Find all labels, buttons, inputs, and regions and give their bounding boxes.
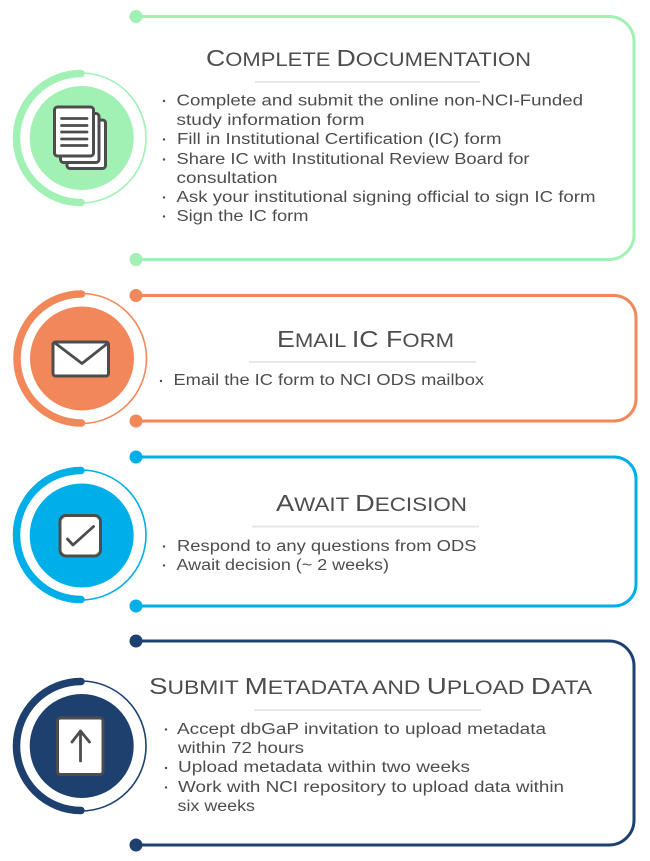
bullet list: Complete and submit the online non-NCI-Funded bbox=[176, 93, 583, 110]
connector dots bbox=[130, 289, 142, 428]
panel outline bbox=[136, 296, 636, 421]
bullet list: Sign the IC form bbox=[176, 208, 308, 225]
icon: upload bbox=[58, 718, 103, 774]
bullet list: consultation bbox=[176, 170, 278, 187]
panel outline bbox=[136, 641, 634, 845]
bullet list: six weeks bbox=[178, 798, 255, 815]
bullet list bbox=[163, 93, 596, 225]
heading: SUBMIT METADATA AND UPLOAD DATA bbox=[149, 673, 592, 699]
connector dots bbox=[130, 10, 142, 266]
panel outline bbox=[136, 457, 636, 606]
connector dots bbox=[130, 634, 142, 852]
bullet list bbox=[163, 538, 477, 574]
heading: COMPLETE DOCUMENTATION bbox=[206, 45, 531, 71]
circular badge bbox=[16, 294, 146, 424]
connector dots bbox=[130, 450, 142, 612]
panel outline bbox=[136, 16, 634, 260]
icon: envelope bbox=[53, 342, 108, 376]
bullet list: Email the IC form to NCI ODS mailbox bbox=[174, 372, 484, 389]
bullet list: Work with NCI repository to upload data within bbox=[178, 779, 564, 796]
bullet list bbox=[165, 721, 564, 815]
bullet list: Await decision (~ 2 weeks) bbox=[176, 557, 389, 574]
panel: complete documentation bbox=[16, 10, 634, 266]
bullet list: Ask your institutional signing official to sign IC form bbox=[176, 189, 596, 206]
icon: checkbox bbox=[60, 516, 100, 556]
heading: AWAIT DECISION bbox=[276, 490, 467, 516]
panel: submit metadata and upload data bbox=[16, 634, 634, 852]
panel: email IC form bbox=[16, 289, 636, 428]
bullet list: Share IC with Institutional Review Board for bbox=[176, 151, 530, 168]
circular badge bbox=[16, 73, 146, 203]
bullet list: study information form bbox=[176, 112, 364, 129]
panel: await decision bbox=[16, 450, 636, 612]
bullet list: within 72 hours bbox=[177, 740, 304, 757]
heading: EMAIL IC F ORM bbox=[277, 326, 454, 352]
circular badge bbox=[16, 470, 146, 600]
bullet list: Respond to any questions from ODS bbox=[177, 538, 476, 555]
bullet list: Fill in Institutional Certification (IC) form bbox=[177, 131, 502, 148]
bullet list: Upload metadata within two weeks bbox=[178, 759, 470, 776]
icon: stacked documents bbox=[54, 107, 106, 168]
bullet list: Accept dbGaP invitation to upload metadata bbox=[177, 721, 546, 738]
circular badge bbox=[16, 681, 146, 811]
